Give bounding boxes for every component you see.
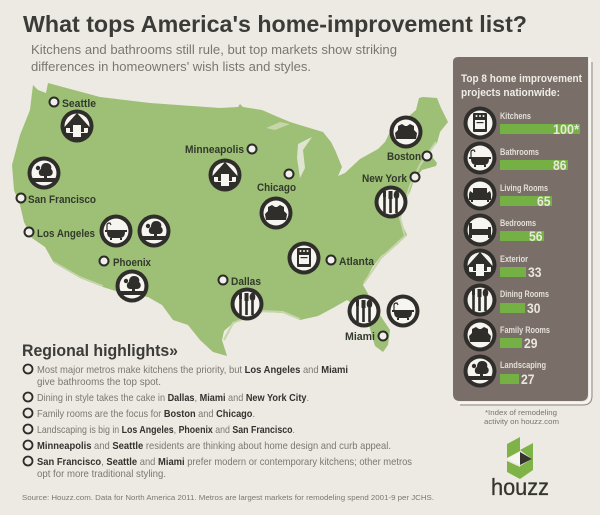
city: Minneapolis: Minneapolis bbox=[185, 144, 244, 156]
row: Family Rooms: 29 bbox=[524, 335, 538, 351]
city: Chicago: Chicago bbox=[257, 182, 296, 194]
highlight: family rooms: Family rooms are the focus for Boston and Chicago. bbox=[37, 408, 255, 420]
highlight: bathrooms bbox=[24, 364, 348, 388]
row: Kitchens: 100* bbox=[553, 121, 579, 137]
row: Dining Rooms: Dining Rooms bbox=[500, 289, 549, 299]
highlight: bathrooms: Most major metros make kitchens the priority, but Los Angeles and Miami bbox=[37, 364, 348, 376]
city: Los Angeles: Los Angeles bbox=[37, 228, 95, 240]
city: Boston bbox=[387, 116, 432, 163]
row: Landscaping: 27 bbox=[521, 371, 535, 387]
city: Boston: Boston bbox=[387, 151, 421, 163]
highlight: curb appeal: Minneapolis and Seattle residents are thinking about home design and curb appeal. bbox=[37, 440, 391, 452]
logo mark bbox=[507, 437, 533, 479]
city: Dallas bbox=[218, 276, 264, 320]
city: Miami: Miami bbox=[345, 331, 375, 343]
city: Seattle bbox=[50, 98, 96, 142]
row: Living Rooms bbox=[464, 178, 552, 210]
highlight: dining: Dining in style takes the cake in Dallas, Miami and New York City. bbox=[37, 392, 309, 404]
row: Bathrooms bbox=[464, 142, 568, 174]
footnote: *Index of remodeling bbox=[485, 408, 557, 417]
highlight: kitchen styles bbox=[24, 456, 412, 480]
city: Dallas: Dallas bbox=[231, 276, 261, 288]
houzz logo bbox=[491, 437, 549, 500]
subtitle bbox=[31, 43, 397, 74]
row: Exterior: Exterior bbox=[500, 254, 528, 264]
row: Bathrooms: Bathrooms bbox=[500, 147, 539, 157]
panel heading bbox=[461, 73, 582, 99]
row: Bedrooms: 56 bbox=[529, 228, 543, 244]
row: Bedrooms: Bedrooms bbox=[500, 218, 536, 228]
row: Landscaping bbox=[464, 354, 546, 388]
row: Family Rooms bbox=[464, 318, 550, 352]
city: Los Angeles bbox=[24, 214, 170, 248]
row: Bathrooms: 86 bbox=[553, 157, 567, 173]
city: Seattle: Seattle bbox=[62, 98, 96, 110]
city: New York: New York bbox=[362, 173, 408, 185]
panel heading: Top 8 home improvement bbox=[461, 73, 582, 85]
panel heading: projects nationwide: bbox=[461, 87, 560, 99]
city: Phoenix: Phoenix bbox=[113, 257, 152, 269]
city: Atlanta: Atlanta bbox=[339, 256, 375, 268]
highlight: kitchen styles: opt for more traditional styling. bbox=[37, 468, 166, 480]
row: Bedrooms bbox=[464, 214, 544, 246]
highlight: landscaping: Landscaping is big in Los Angeles, Phoenix and San Francisco. bbox=[37, 424, 295, 436]
subtitle: differences in homeowners' wish lists and styles. bbox=[31, 60, 311, 74]
logo wordmark: houzz bbox=[491, 474, 549, 500]
row: Living Rooms: Living Rooms bbox=[500, 183, 548, 193]
row: Landscaping: Landscaping bbox=[500, 360, 546, 370]
row: Family Rooms: Family Rooms bbox=[500, 325, 550, 335]
highlight: kitchen styles: San Francisco, Seattle and Miami prefer modern or contemporary kitchens; other metros bbox=[37, 456, 412, 468]
city: Atlanta bbox=[288, 242, 375, 274]
source note: Source: Houzz.com. Data for North America 2011. Metros are largest markets for remodeling spend 2001-9 per JCHS. bbox=[22, 493, 434, 502]
title: What tops America's home-improvement list? bbox=[23, 11, 527, 37]
footnote: activity on houzz.com bbox=[484, 417, 559, 426]
panel: top 8 projects bbox=[453, 57, 592, 405]
city: Miami bbox=[345, 294, 420, 343]
row: Dining Rooms bbox=[464, 284, 549, 316]
map of the United States bbox=[12, 83, 448, 356]
row: Exterior: 33 bbox=[528, 264, 542, 280]
row: Kitchens: Kitchens bbox=[500, 111, 531, 121]
city: Minneapolis bbox=[185, 144, 256, 192]
row: Kitchens bbox=[464, 106, 580, 140]
city: Phoenix bbox=[100, 256, 152, 302]
row: Exterior bbox=[464, 248, 542, 282]
regional highlights heading: Regional highlights» bbox=[22, 341, 178, 360]
row: Living Rooms: 65 bbox=[537, 193, 551, 209]
city: San Francisco: San Francisco bbox=[28, 194, 96, 206]
city: San Francisco bbox=[16, 156, 96, 206]
city: Chicago bbox=[257, 170, 296, 230]
footnote bbox=[484, 408, 559, 426]
highlight: bathrooms: give bathrooms the top spot. bbox=[37, 376, 161, 388]
city: New York bbox=[362, 172, 420, 218]
subtitle: Kitchens and bathrooms still rule, but top markets show striking bbox=[31, 43, 397, 57]
Great Lakes and coast details bbox=[54, 122, 436, 340]
row: Dining Rooms: 30 bbox=[527, 300, 541, 316]
